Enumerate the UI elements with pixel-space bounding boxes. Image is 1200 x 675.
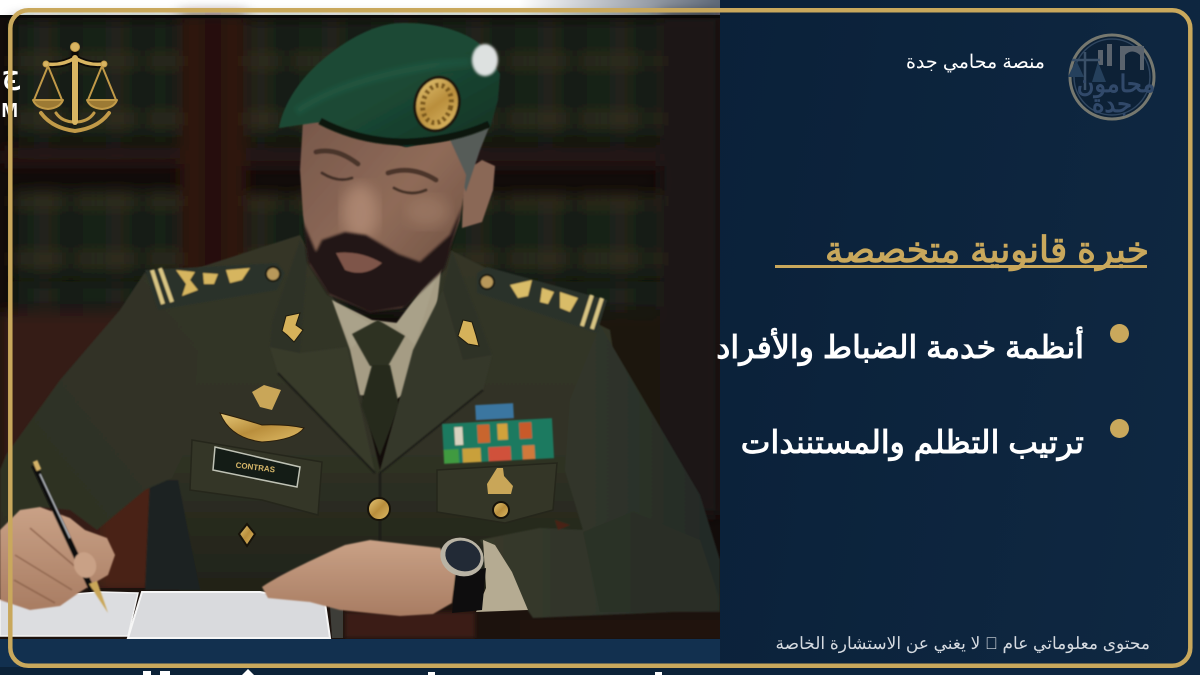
desk surface — [0, 588, 720, 640]
icon: gold scales of justice — [33, 42, 117, 131]
ear — [462, 160, 495, 228]
left pocket with name tag — [190, 440, 322, 515]
white tuft — [472, 44, 498, 76]
neck and shirt collar — [332, 262, 442, 400]
bullet text 1: أنظمة خدمة الضباط والأفراد — [716, 329, 1084, 365]
heading underline — [775, 265, 1147, 268]
right sleeve — [480, 325, 720, 618]
bullet dot 2 — [1110, 419, 1129, 438]
logo: Jeddah lawyers round emblem: محامون — [1077, 71, 1155, 99]
eyes and brows — [316, 151, 436, 193]
cropped watermark letters at the left edge: M — [1, 100, 18, 122]
left sleeve — [0, 272, 200, 535]
face — [300, 120, 466, 312]
shirt cuff — [476, 540, 528, 612]
grey temple hair — [448, 125, 490, 192]
beret badge — [409, 72, 465, 136]
bookshelf background — [0, 15, 720, 640]
heading: specialised legal expertise: خبرة قانونية متخصصة — [825, 229, 1149, 270]
writing hand with pen — [0, 461, 115, 613]
logo: Jeddah lawyers round emblem — [1068, 34, 1156, 120]
bullet dot 1 — [1110, 324, 1129, 343]
head — [300, 120, 495, 313]
bullet text 2: ترتيب التظلم والمستنندات — [741, 424, 1084, 460]
logo: Jeddah lawyers round emblem: جدة — [1092, 91, 1132, 118]
right pocket — [437, 463, 557, 523]
left pocket with name tag: CONTRAS — [235, 461, 276, 474]
lips — [336, 252, 382, 273]
beret — [279, 23, 500, 147]
top white strip — [0, 0, 720, 15]
necktie — [352, 320, 405, 456]
photo: military officer signing a document at a desk — [0, 0, 720, 675]
collar pins — [282, 313, 479, 346]
cropped watermark letters at the left edge — [1, 60, 20, 122]
pilot wings badge — [220, 385, 304, 442]
left epaulette — [145, 263, 285, 310]
footer disclaimer: محتوى معلوماتي عام  لا يغني عن الاستشارة الخاصة — [776, 634, 1150, 653]
paper on an open folder — [0, 592, 343, 638]
lapels — [270, 240, 492, 590]
wristwatch — [435, 532, 489, 613]
right epaulette — [477, 267, 607, 333]
uniform: torso — [0, 235, 720, 618]
brass buttons — [239, 498, 509, 546]
platform name: منصة محامي جدة — [906, 52, 1045, 73]
medal ribbons — [441, 401, 554, 464]
bottom navy strip — [0, 639, 720, 675]
resting hand — [262, 540, 456, 616]
beard and moustache — [303, 205, 463, 313]
